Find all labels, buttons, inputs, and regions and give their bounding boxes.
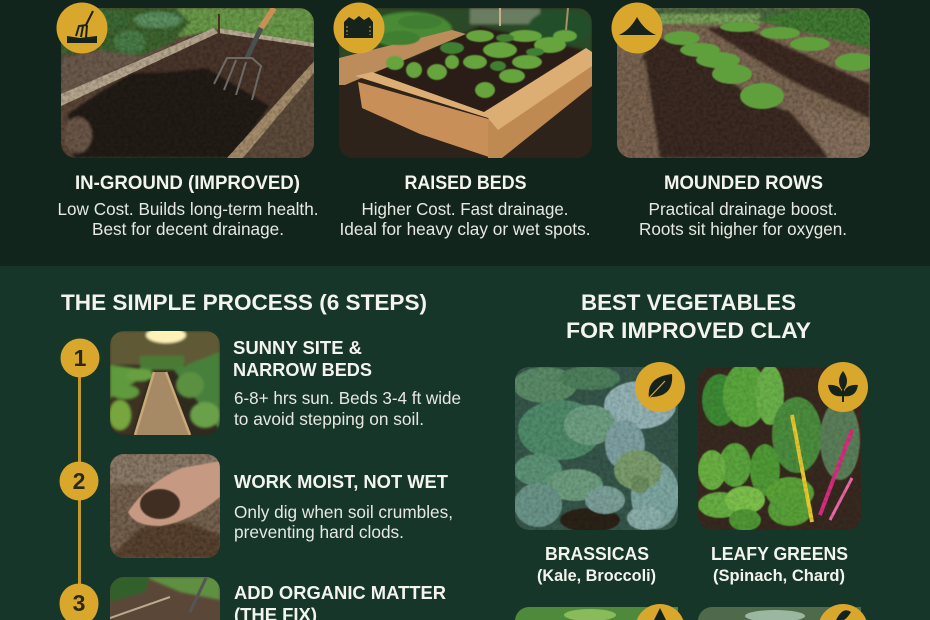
step 2 description [234, 502, 453, 542]
icon: digging fork badge [56, 2, 108, 54]
step 1 photo: sunny beds [109, 327, 220, 435]
photo: mounded soil rows [617, 8, 875, 158]
label: brassicas: BRASSICAS [545, 543, 649, 564]
panel: in-ground option [56, 2, 318, 239]
photo: kale and broccoli [513, 366, 679, 532]
step 1 heading: NARROW BEDS [233, 359, 372, 380]
description: in-ground: Low Cost. Builds long-term health. [58, 199, 318, 219]
step 3 photo: adding compost [110, 577, 220, 620]
page background: top band [0, 0, 930, 266]
description: mounded rows: Practical drainage boost. [648, 199, 838, 219]
card: brassicas [513, 362, 685, 585]
page background: bottom band [0, 266, 930, 620]
step 3 heading [234, 582, 446, 620]
heading: best vegetables: FOR IMPROVED CLAY [566, 318, 811, 343]
step 1 heading [233, 337, 372, 380]
heading: in-ground: IN-GROUND (IMPROVED) [75, 173, 300, 194]
heading: raised beds: RAISED BEDS [404, 173, 526, 194]
photo: spinach and chard [698, 363, 861, 531]
label: brassicas [537, 543, 656, 585]
step 2 [60, 454, 453, 558]
heading: simple process: THE SIMPLE PROCESS (6 STEPS) [61, 290, 427, 315]
heading: best vegetables [566, 290, 811, 343]
description: raised beds: Ideal for heavy clay or wet spots. [340, 219, 590, 239]
step 1 description [234, 388, 461, 429]
panel: raised beds option [334, 2, 592, 239]
step 1 description: 6-8+ hrs sun. Beds 3-4 ft wide [234, 388, 461, 408]
photo: cropped vegetable [698, 607, 861, 620]
step 1 number [60, 338, 100, 378]
description: mounded rows [639, 199, 847, 239]
icon: sprout badge [818, 362, 868, 412]
card: third vegetable (cropped) [515, 604, 683, 620]
icon: badge (cropped) [820, 604, 866, 620]
panel: mounded rows option [612, 2, 875, 239]
step 2 heading: WORK MOIST, NOT WET [234, 471, 449, 492]
photo: cropped vegetable [515, 607, 678, 620]
label: leafy greens: LEAFY GREENS [711, 543, 848, 564]
step 1 number: 1 [74, 345, 87, 371]
panel: best vegetables [513, 290, 868, 620]
icon: leaf badge [635, 362, 685, 412]
step 1 [60, 327, 461, 435]
label: leafy greens [711, 543, 848, 585]
timeline line [78, 358, 81, 620]
heading: best vegetables: BEST VEGETABLES [581, 290, 796, 315]
description: in-ground: Best for decent drainage. [92, 219, 284, 239]
description: raised beds [340, 199, 590, 239]
icon: badge (cropped) [637, 604, 683, 620]
step 2 number: 2 [73, 468, 85, 494]
step 3 [60, 577, 446, 620]
photo: improved in-ground bed [61, 8, 314, 158]
step 2 description: preventing hard clods. [234, 522, 404, 542]
description: raised beds: Higher Cost. Fast drainage. [362, 199, 568, 219]
step 1 heading: SUNNY SITE & [233, 337, 362, 358]
heading: mounded rows: MOUNDED ROWS [664, 173, 823, 194]
label: brassicas: (Kale, Broccoli) [537, 566, 656, 585]
card: leafy greens [698, 362, 868, 585]
step 1 description: to avoid stepping on soil. [234, 409, 424, 429]
step 3 number [60, 584, 98, 620]
step 2 photo: hand holding soil [110, 454, 220, 558]
label: leafy greens: (Spinach, Chard) [713, 566, 845, 585]
step 2 number [60, 462, 98, 500]
panel: simple process [60, 290, 461, 620]
description: in-ground [58, 199, 318, 239]
photo: raised wooden bed [339, 8, 592, 158]
icon: mound badge [612, 2, 662, 54]
description: mounded rows: Roots sit higher for oxygen. [639, 219, 847, 239]
step 3 heading: ADD ORGANIC MATTER [234, 582, 446, 603]
step 3 number: 3 [73, 590, 85, 616]
step 2 description: Only dig when soil crumbles, [234, 502, 453, 522]
icon: raised bed badge [334, 2, 384, 54]
card: fourth vegetable (cropped) [698, 604, 866, 620]
